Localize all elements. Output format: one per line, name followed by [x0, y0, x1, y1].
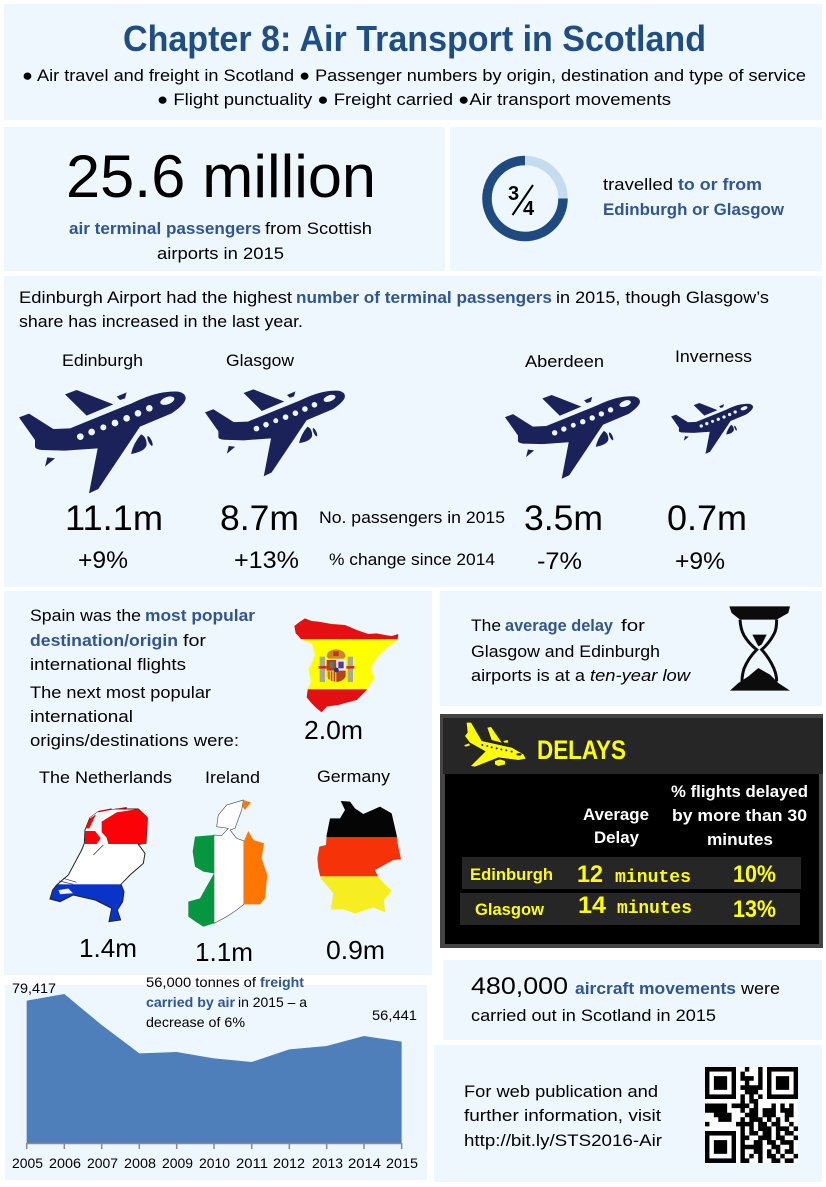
aircraft movements text: carried out in Scotland in 2015	[471, 1006, 716, 1025]
column heading: percent delayed	[671, 782, 808, 849]
percentage changes: +9%	[675, 548, 725, 575]
destinations text: international flights	[30, 655, 186, 674]
passengers caption	[69, 219, 372, 263]
icon: donut three quarters: 3	[508, 183, 519, 205]
row label: passengers: No. passengers in 2015	[319, 508, 505, 527]
airport names: Edinburgh	[62, 351, 143, 370]
chart x axis years: 2010	[199, 1155, 230, 1171]
row: Glasgow delays: Glasgow	[475, 900, 545, 919]
big number: 25.6 million	[66, 143, 376, 210]
icon: Germany flag map	[317, 801, 401, 914]
country values: 1.4m	[79, 933, 137, 963]
percentage changes: +13%	[234, 547, 299, 574]
airports intro text: in 2015, though Glasgow’s	[556, 288, 769, 307]
row: Edinburgh delays: 12	[577, 861, 603, 888]
row: Edinburgh delays: Edinburgh	[470, 865, 553, 884]
row: Glasgow delays: minutes	[617, 899, 692, 919]
icon: plane Edinburgh	[19, 390, 186, 493]
percentage changes: +9%	[78, 547, 128, 574]
country names: Germany	[317, 767, 391, 786]
country values: 1.1m	[195, 937, 253, 967]
chart x axis years: 2014	[348, 1155, 381, 1171]
column heading: percent delayed: by more than 30	[672, 806, 807, 825]
subtitle line 2: ● Flight punctuality ● Freight carried ●Air transport movements	[157, 90, 671, 109]
chart x axis years: 2011	[236, 1155, 268, 1171]
icon: QR code	[705, 1067, 798, 1163]
column heading: percent delayed: minutes	[707, 830, 773, 849]
column heading: average delay	[583, 805, 649, 847]
destinations text: international	[30, 707, 133, 726]
chart x axis years: 2012	[273, 1155, 305, 1171]
further information text: further information, visit	[464, 1106, 661, 1125]
panel: average delay	[440, 591, 822, 706]
country values: 0.9m	[326, 935, 385, 965]
row: Edinburgh delays: minutes	[615, 868, 691, 888]
title: Chapter 8: Air Transport in Scotland	[123, 18, 706, 59]
chart x axis years: 2009	[162, 1155, 193, 1171]
passengers caption: from Scottish	[265, 219, 372, 238]
aircraft movements text: aircraft movements	[575, 979, 736, 998]
country values	[79, 933, 385, 967]
icon: plane Glasgow	[205, 389, 345, 476]
panel: delays board	[440, 714, 823, 948]
delay text: airports is at a	[471, 666, 586, 685]
row: Glasgow delays	[460, 892, 800, 925]
icon: Spain flag map	[294, 618, 398, 712]
percentage changes: -7%	[537, 548, 582, 575]
destinations text: most popular	[145, 606, 255, 625]
airports intro text: number of terminal passengers	[296, 288, 552, 307]
icon: donut three quarters: 4	[523, 198, 535, 220]
three quarters caption: Edinburgh or Glasgow	[603, 200, 785, 219]
row: Edinburgh delays: 10%	[733, 861, 776, 888]
chart x axis years: 2013	[312, 1155, 343, 1171]
destinations text: for	[183, 631, 206, 650]
chart value start: 79,417	[12, 980, 56, 996]
panel: freight chart	[5, 974, 427, 1180]
passenger numbers: 11.1m	[65, 499, 163, 538]
chart value end: 56,441	[372, 1007, 417, 1023]
chart x axis years: 2007	[87, 1155, 118, 1171]
percentage changes	[78, 547, 725, 575]
destinations text: destination/origin	[30, 631, 178, 650]
delay text: Glasgow and Edinburgh	[471, 642, 660, 661]
airport names: Inverness	[675, 347, 752, 366]
panel: three quarters	[450, 127, 822, 271]
column heading: percent delayed: % flights delayed	[671, 782, 808, 801]
airport names: Glasgow	[226, 351, 295, 370]
delay text	[471, 616, 692, 685]
freight annotation: freight	[260, 974, 304, 990]
delay text: ten-year low	[590, 666, 692, 685]
three quarters caption	[603, 175, 785, 219]
country names	[39, 767, 391, 787]
chart x axis years: 2015	[386, 1155, 418, 1171]
column heading: average delay: Delay	[594, 828, 640, 847]
chart x axis years: 2006	[49, 1155, 81, 1171]
passenger numbers: 3.5m	[524, 499, 603, 538]
three quarters caption: to or from	[678, 175, 762, 194]
destinations text: The next most popular	[30, 683, 211, 702]
destinations text: Spain was the	[30, 606, 141, 625]
further information text	[464, 1082, 662, 1150]
airport names: Aberdeen	[525, 352, 604, 371]
icon: hourglass	[729, 606, 790, 691]
chart x axis years: 2005	[12, 1155, 43, 1171]
icon: yellow plane	[464, 723, 526, 767]
Spain value: 2.0m	[304, 715, 363, 745]
icon: plane Inverness	[671, 403, 753, 454]
icon: plane Aberdeen	[505, 395, 640, 479]
aircraft movements text: 480,000	[471, 973, 568, 1000]
panel: further information	[434, 1045, 822, 1182]
panel: destinations	[4, 591, 432, 975]
passengers caption: airports in 2015	[157, 244, 284, 263]
passengers caption: air terminal passengers	[69, 219, 261, 238]
aircraft movements text: were	[740, 979, 780, 998]
freight annotation	[146, 974, 307, 1030]
delay text: for	[621, 616, 645, 635]
row: Glasgow delays: 13%	[733, 896, 776, 923]
row label: change: % change since 2014	[329, 550, 495, 569]
panel: aircraft movements	[443, 960, 822, 1040]
further information text: http://bit.ly/STS2016-Air	[464, 1131, 662, 1150]
country names: Ireland	[205, 768, 260, 787]
panel: airports	[4, 276, 822, 587]
airports intro text: share has increased in the last year.	[19, 312, 303, 331]
freight annotation: 56,000 tonnes of	[146, 974, 256, 990]
row: Edinburgh delays	[462, 857, 801, 889]
column heading: average delay: Average	[583, 805, 649, 824]
passenger numbers: 0.7m	[667, 499, 747, 538]
icon: Ireland flag map	[188, 800, 267, 927]
icon: Netherlands flag map	[49, 807, 148, 922]
further information text: For web publication and	[464, 1082, 658, 1101]
subtitle line 1: ● Air travel and freight in Scotland ● Passenger numbers by origin, destination and type of service	[22, 66, 806, 85]
row: Glasgow delays: 14	[578, 892, 607, 919]
destinations text	[30, 606, 255, 750]
delays heading: DELAYS	[537, 735, 626, 765]
panel: total passengers	[4, 127, 445, 271]
airports intro text: Edinburgh Airport had the highest	[19, 288, 292, 307]
passenger numbers	[65, 499, 747, 538]
icon: donut three quarters	[487, 160, 563, 236]
aircraft movements text	[471, 973, 780, 1025]
passenger numbers: 8.7m	[220, 499, 299, 538]
area chart	[27, 994, 402, 1149]
three quarters caption: travelled	[603, 175, 673, 194]
chart x axis years	[12, 1155, 418, 1171]
panel: title	[4, 4, 822, 120]
country names: The Netherlands	[39, 768, 172, 787]
airports intro text	[19, 288, 769, 331]
airport names	[62, 347, 752, 371]
destinations text: origins/destinations were:	[30, 731, 239, 750]
freight annotation: decrease of 6%	[146, 1014, 245, 1030]
delay text: average delay	[505, 616, 614, 635]
delay text: The	[471, 616, 501, 635]
freight annotation: in 2015 – a	[238, 994, 307, 1010]
freight annotation: carried by air	[146, 994, 236, 1010]
chart x axis years: 2008	[124, 1155, 156, 1171]
